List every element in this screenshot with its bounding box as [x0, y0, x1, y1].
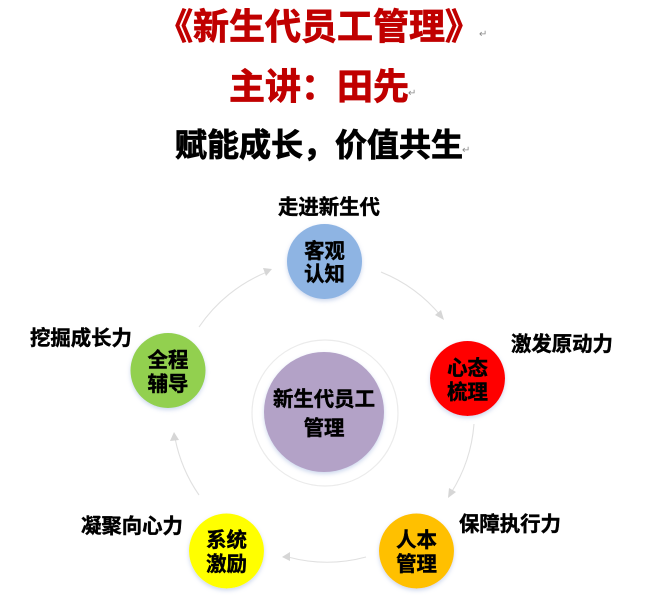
arrow: left to top	[199, 268, 272, 327]
node: mindset	[430, 341, 505, 416]
arrow: bottom left to left	[170, 432, 199, 495]
slogan return mark: ↵	[462, 145, 470, 156]
node: people management: 管理	[396, 553, 437, 576]
node: people management: 人本	[396, 529, 437, 552]
node: people management	[379, 514, 454, 588]
arrow: right to bottom right	[448, 424, 474, 498]
arrow: bottom right to bottom left	[282, 552, 366, 562]
presenter line: 主讲：田先	[229, 66, 409, 107]
node: full coaching: 全程	[148, 348, 188, 372]
centre node: 新生代员工	[273, 388, 375, 411]
label: bottom right: 保障执行力	[459, 513, 561, 536]
label: top: 走进新生代	[278, 196, 380, 219]
centre node: 管理	[304, 417, 344, 440]
node: incentive system: 系统	[206, 528, 247, 552]
arrow: top to right	[381, 272, 444, 320]
label: bottom left: 凝聚向心力	[81, 515, 183, 538]
node: mindset: 梳理	[447, 381, 488, 404]
title: 《新生代员工管理》	[157, 6, 481, 47]
node: objective awareness: 认知	[304, 263, 345, 286]
presenter return mark: ↵	[408, 88, 416, 99]
node: incentive system	[189, 514, 264, 588]
label: right: 激发原动力	[511, 333, 613, 356]
node: incentive system: 激励	[206, 553, 247, 576]
title return mark: ↵	[479, 29, 487, 40]
node: full coaching	[130, 333, 206, 408]
node: objective awareness: 客观	[304, 239, 345, 263]
centre node	[264, 352, 384, 472]
node: mindset: 心态	[447, 356, 488, 380]
label: left: 挖掘成长力	[30, 326, 132, 350]
slogan: 赋能成长，价值共生	[175, 127, 463, 163]
centre ring	[252, 340, 398, 486]
node: full coaching: 辅导	[148, 372, 188, 396]
node: objective awareness	[287, 224, 362, 299]
